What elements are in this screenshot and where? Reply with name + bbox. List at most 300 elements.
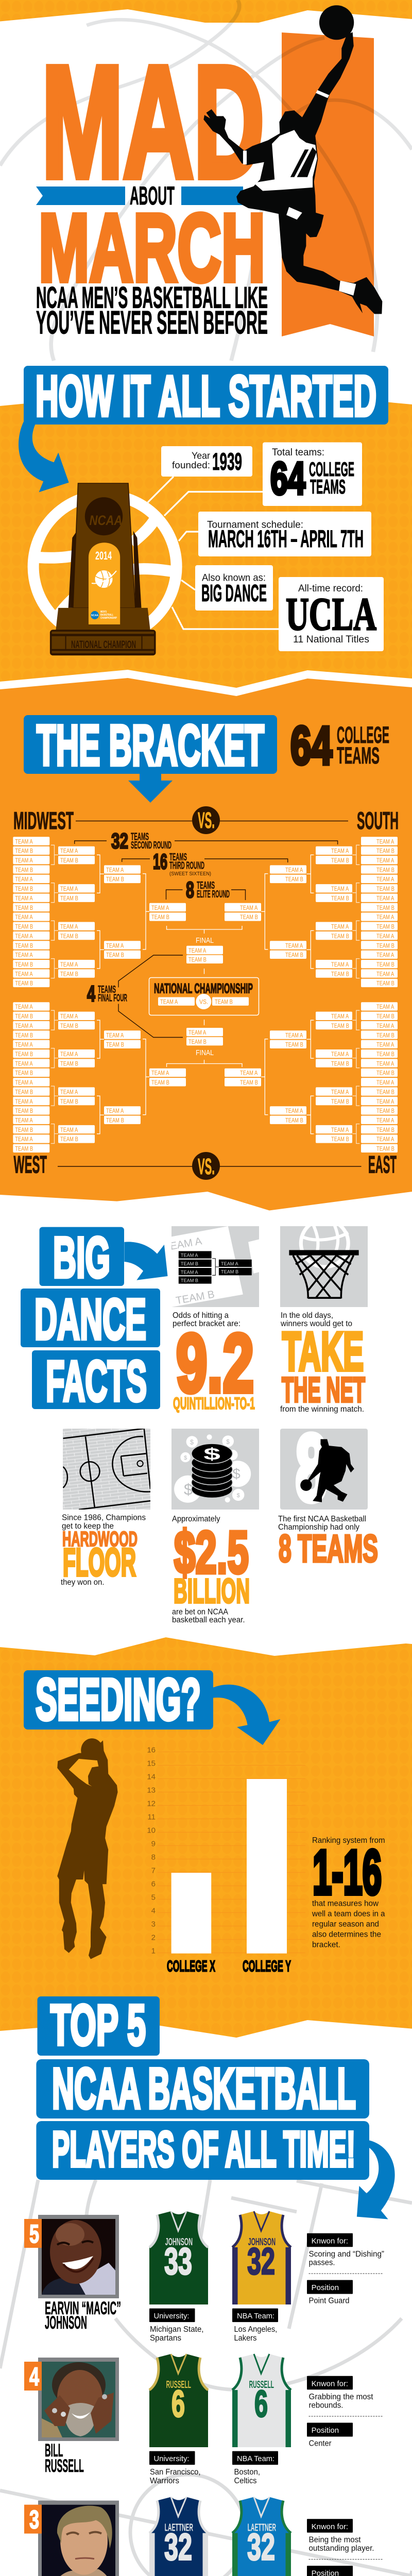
bracket: west region: TEAM B xyxy=(15,1146,33,1153)
final: upper matchup: TEAM B xyxy=(188,957,207,963)
round label: 8 teams elite round xyxy=(166,877,245,903)
bracket: east region: TEAM A xyxy=(285,1032,303,1039)
jersey: nba team xyxy=(232,2211,291,2304)
bracket: east region: TEAM B xyxy=(331,1136,349,1143)
chart axis numbers: 2 xyxy=(151,1933,156,1942)
bracket: midwest region: TEAM B xyxy=(151,914,169,921)
round label: 32 teams second round: SECOND ROUND xyxy=(131,840,171,851)
callout: all-time record: 11 National Titles xyxy=(293,634,369,645)
text block: seeding explanation: that measures how xyxy=(312,1899,379,1908)
bracket: east region: TEAM A xyxy=(331,1127,349,1133)
jersey: university: 6 xyxy=(171,2383,185,2425)
bracket: east region: TEAM A xyxy=(376,1023,394,1029)
arrow: heading to player list xyxy=(357,2140,395,2219)
panel: national championship: VS. xyxy=(199,998,208,1006)
bracket: east region: TEAM B xyxy=(376,1127,394,1133)
chart axis numbers: 14 xyxy=(147,1772,156,1782)
icon: NCAA trophy: NATIONAL CHAMPION xyxy=(71,639,136,651)
bracket: east region: TEAM B xyxy=(376,1051,394,1058)
jersey: university xyxy=(149,2211,208,2304)
icon: NCAA trophy: NCAA xyxy=(91,614,98,617)
connector lines to facts xyxy=(148,477,279,629)
region label row: midwest vs south xyxy=(13,806,399,834)
jersey: university: RUSSELL xyxy=(166,2379,191,2391)
fact: odds of perfect bracket: QUINTILLION-TO-1 xyxy=(173,1394,255,1413)
jersey: university xyxy=(149,2354,208,2447)
final: lower matchup xyxy=(186,1028,223,1057)
top yellow band xyxy=(0,0,412,23)
region label row: west vs east: WEST xyxy=(13,1151,47,1178)
icon: coin stack tile: $ xyxy=(203,1444,220,1463)
university label xyxy=(149,2309,204,2343)
jersey: nba team: 6 xyxy=(254,2383,268,2425)
bar: college y xyxy=(247,1779,287,1954)
icon: bracket tile: TEAM A xyxy=(181,1253,198,1258)
photo: Magic Johnson xyxy=(38,2215,119,2298)
round label: 16 teams third round: THIRD ROUND xyxy=(169,860,204,872)
heading: big dance facts: BIG xyxy=(53,1226,110,1290)
jersey: university: JOHNSON xyxy=(165,2236,193,2248)
bracket: south region: TEAM A xyxy=(331,961,349,968)
round label: 16 teams third round: TEAMS xyxy=(169,852,187,863)
name: BILL xyxy=(45,2441,63,2461)
text block: seeding explanation xyxy=(312,1836,385,1950)
name xyxy=(45,2298,121,2333)
fact: first championship 8 teams xyxy=(278,1415,378,1570)
callout: year founded: 1939 xyxy=(212,448,242,475)
background: court lines xyxy=(0,2180,412,2576)
known for and position: Knwon for: xyxy=(312,2380,348,2388)
bracket: midwest region: TEAM A xyxy=(15,857,33,864)
callout: year founded: Year xyxy=(192,451,210,461)
round label: 16 teams third round: 16 xyxy=(153,849,167,874)
final: upper matchup: FINAL xyxy=(196,936,214,945)
final: lower matchup: TEAM B xyxy=(188,1039,207,1045)
callout: also known as: BIG DANCE xyxy=(201,580,267,606)
heading: big dance facts: FACTS xyxy=(46,1349,147,1413)
bracket: midwest region: TEAM B xyxy=(15,942,33,950)
title: MARCH: MARCH xyxy=(39,195,265,301)
bracket: west region: TEAM A xyxy=(15,1098,33,1105)
icon: bracket tile: TEAM A xyxy=(181,1269,198,1275)
callout: total teams: TEAMS xyxy=(310,476,346,498)
rank tag 4 xyxy=(24,2362,42,2391)
bracket: west region: TEAM B xyxy=(15,1051,33,1058)
bracket: midwest region: TEAM B xyxy=(15,867,33,874)
fact: odds of perfect bracket: 9.2 xyxy=(176,1317,254,1409)
round label: 8 teams elite round: TEAMS xyxy=(197,880,215,891)
fact: billions bet: are bet on NCAA xyxy=(172,1607,229,1617)
bracket: east region: TEAM A xyxy=(331,1051,349,1058)
bracket: east region: TEAM A xyxy=(376,1098,394,1105)
panel: national championship: TEAM B xyxy=(215,998,233,1006)
text block: seeding explanation: Ranking system from xyxy=(312,1836,385,1845)
icon: NCAA trophy: MEN'S xyxy=(100,611,107,614)
icon: coin stack tile: $ xyxy=(184,1455,187,1461)
text block: seeding explanation: regular season and xyxy=(312,1920,379,1929)
bracket: south region: TEAM A xyxy=(376,876,394,883)
icon: NCAA trophy: 2014 xyxy=(95,549,112,562)
fact: first championship 8 teams: Championship had only xyxy=(278,1523,359,1532)
known for and position: Position xyxy=(312,2426,339,2435)
callout: total teams: Total teams: xyxy=(272,447,324,458)
fact: hardwood floor: FLOOR xyxy=(63,1540,136,1585)
fact: take the net: winners would get to xyxy=(280,1319,352,1328)
heading: top 5 ncaa basketball players of all time: TOP 5 xyxy=(50,1993,146,2057)
bracket: south region: TEAM A xyxy=(285,867,303,874)
bracket: south region: TEAM A xyxy=(376,857,394,864)
bracket: east region: TEAM B xyxy=(376,1089,394,1096)
player row: rank 4 Bill Russell xyxy=(24,2354,383,2485)
icon: NCAA trophy xyxy=(50,483,156,655)
fact: hardwood floor xyxy=(61,1429,150,1587)
round label: 8 teams elite round: 8 xyxy=(186,877,194,903)
round label: 32 teams second round: 32 xyxy=(111,828,128,853)
bracket: west region: TEAM A xyxy=(60,1089,78,1096)
bracket: west region: TEAM B xyxy=(15,1089,33,1096)
bracket: west region: TEAM B xyxy=(15,1127,33,1133)
bracket: center connectors xyxy=(167,926,242,1067)
bracket: south region: TEAM A xyxy=(331,886,349,892)
known for and position: Position xyxy=(312,2283,339,2292)
bracket: south region: TEAM B xyxy=(331,857,349,864)
bracket: west region: TEAM B xyxy=(15,1070,33,1077)
fact: hardwood floor: they won on. xyxy=(61,1578,104,1587)
bracket: west region: TEAM A xyxy=(15,1004,33,1011)
callout: all-time record xyxy=(279,577,384,651)
bracket: west region: TEAM B xyxy=(106,1117,124,1124)
nba team label: Boston, xyxy=(234,2468,260,2477)
text block: seeding explanation: bracket. xyxy=(312,1941,340,1950)
icon: NCAA trophy: CHAMPIONSHIP xyxy=(100,617,117,620)
icon: coin stack tile: $ xyxy=(226,1438,230,1446)
bracket: west region: TEAM A xyxy=(60,1051,78,1058)
bracket: midwest region: TEAM B xyxy=(15,961,33,968)
stat: 64 college teams: 64 xyxy=(290,716,332,776)
final: upper matchup xyxy=(186,936,223,963)
panel: national championship xyxy=(149,978,259,1015)
heading: big dance facts: DANCE xyxy=(35,1287,146,1351)
arrow: down to bracket xyxy=(128,773,173,803)
text block: seeding explanation: also determines the xyxy=(312,1930,381,1939)
bracket: midwest region: TEAM A xyxy=(15,914,33,921)
bracket: west region: TEAM B xyxy=(151,1079,169,1086)
icon: white basketball behind trophy xyxy=(33,495,177,638)
rank tag 3: 3 xyxy=(29,2505,39,2534)
bracket: midwest region: TEAM A xyxy=(15,971,33,978)
icon: dribbling player tile xyxy=(280,1415,368,1520)
bracket: east region: TEAM B xyxy=(240,1079,258,1086)
arrow: big dance to odds xyxy=(124,1242,168,1280)
bracket: south region: TEAM A xyxy=(240,905,258,911)
chart axis numbers: 10 xyxy=(147,1826,156,1835)
bracket: south region xyxy=(225,837,398,987)
university label: University: xyxy=(153,2454,190,2463)
known for and position: outstanding player. xyxy=(309,2544,374,2553)
bracket: midwest region: TEAM A xyxy=(15,876,33,883)
fact: odds of perfect bracket: Odds of hitting a xyxy=(173,1311,229,1320)
chart: seed ranking bars xyxy=(147,1745,305,1975)
bracket: south region: TEAM B xyxy=(376,942,394,950)
bracket: west region: TEAM A xyxy=(60,1013,78,1020)
nba team label xyxy=(232,2309,278,2343)
callout: year founded: founded: xyxy=(172,460,210,470)
bracket: south region: TEAM B xyxy=(376,923,394,930)
icon: shooting player silhouette xyxy=(57,1738,118,1959)
icon: basketball court tile xyxy=(63,1429,150,1510)
jersey: university: LAETTNER xyxy=(165,2522,193,2534)
bracket: west region: TEAM A xyxy=(106,1032,124,1039)
bracket: east region: TEAM B xyxy=(331,1060,349,1067)
final: lower matchup: TEAM A xyxy=(188,1029,207,1036)
bracket: east region: TEAM B xyxy=(285,1042,303,1048)
callout: tournament schedule: Tournament schedule: xyxy=(207,519,303,531)
chart axis numbers: 3 xyxy=(151,1920,156,1929)
rank tag 5 xyxy=(24,2219,42,2248)
bracket: east region: TEAM A xyxy=(331,1089,349,1096)
bracket: west region: TEAM B xyxy=(15,1013,33,1020)
known for and position: Knwon for: xyxy=(312,2237,348,2246)
bracket: south region: TEAM A xyxy=(376,838,394,845)
round label: 4 teams final four: FINAL FOUR xyxy=(98,993,127,1004)
fact: billions bet: $2.5 xyxy=(174,1519,249,1586)
bracket: west region: TEAM B xyxy=(60,1136,78,1143)
bracket: midwest region xyxy=(13,837,186,987)
fact: first championship 8 teams: The first NCAA Basketball xyxy=(278,1515,366,1523)
bracket: east region: TEAM B xyxy=(376,1146,394,1153)
bracket: midwest region: TEAM B xyxy=(15,923,33,930)
chart axis numbers: 13 xyxy=(147,1786,156,1795)
callout: also known as: Also known as: xyxy=(202,573,266,584)
bracket: west region: TEAM B xyxy=(15,1032,33,1039)
bracket: east region: TEAM A xyxy=(376,1117,394,1124)
fact: billions bet: Approximately xyxy=(172,1515,220,1523)
region label row: midwest vs south: VS. xyxy=(198,808,215,833)
fact: billions bet: basketball each year. xyxy=(172,1616,245,1624)
bracket: midwest region: TEAM A xyxy=(60,848,78,855)
bracket: west region: TEAM B xyxy=(60,1098,78,1105)
nba team label: Los Angeles, xyxy=(234,2325,277,2334)
name xyxy=(45,2441,84,2476)
final: upper matchup: TEAM A xyxy=(188,947,207,954)
callout: tournament schedule xyxy=(198,512,371,556)
nba team label: NBA Team: xyxy=(237,2312,274,2320)
label: college y: COLLEGE Y xyxy=(243,1957,291,1975)
round label: 16 teams third round xyxy=(122,849,288,877)
fact: take the net: In the old days, xyxy=(281,1311,333,1320)
university label: Warriors xyxy=(150,2477,179,2485)
bar: college x xyxy=(171,1873,211,1954)
known for and position: rebounds. xyxy=(309,2401,343,2410)
chart grid lines xyxy=(158,1752,305,1953)
bracket: midwest region: TEAM B xyxy=(106,952,124,959)
rank tag 3 xyxy=(24,2505,42,2534)
round label: 4 teams final four: TEAMS xyxy=(98,984,116,995)
bracket: east region: TEAM A xyxy=(240,1070,258,1077)
university label xyxy=(149,2451,201,2485)
arrow: heading to trophy xyxy=(19,421,69,492)
known for and position xyxy=(307,2519,383,2576)
nba team label: Celtics xyxy=(234,2477,257,2485)
icon: bracket tile: EAM A xyxy=(169,1235,203,1252)
bracket: midwest region: TEAM B xyxy=(15,848,33,855)
bracket: west region: TEAM A xyxy=(15,1079,33,1086)
callout: also known as xyxy=(195,565,273,611)
bracket: midwest region: TEAM A xyxy=(15,895,33,902)
chart axis numbers: 1 xyxy=(151,1946,156,1956)
bracket: south region: TEAM A xyxy=(376,914,394,921)
chart axis numbers: 5 xyxy=(151,1893,156,1902)
chart axis numbers: 7 xyxy=(151,1866,156,1875)
bracket: south region: TEAM B xyxy=(331,933,349,940)
heading: the bracket xyxy=(24,714,277,777)
bracket: midwest region: TEAM B xyxy=(60,895,78,902)
bracket: east region: TEAM B xyxy=(331,1023,349,1029)
callout: year founded xyxy=(161,446,252,477)
icon: coin stack tile: $ xyxy=(184,1481,193,1498)
fact: billions bet xyxy=(171,1429,259,1624)
panel: bracket background xyxy=(0,678,412,1211)
bracket: east region: TEAM B xyxy=(331,1098,349,1105)
orange hero ribbon xyxy=(282,32,374,336)
bracket: midwest region: TEAM A xyxy=(60,961,78,968)
bracket: west region: TEAM A xyxy=(15,1023,33,1029)
known for and position: Point Guard xyxy=(309,2296,349,2305)
bracket: south region: TEAM B xyxy=(376,905,394,911)
bracket: midwest region: TEAM A xyxy=(15,952,33,959)
region label row: midwest vs south: MIDWEST xyxy=(13,807,74,834)
known for and position xyxy=(307,2376,383,2448)
panel: seeding background xyxy=(0,1637,412,2038)
icon: coin stack tile xyxy=(171,1429,259,1510)
icon: bracket tile: TEAM B xyxy=(181,1261,198,1266)
bracket: midwest region: TEAM A xyxy=(15,933,33,940)
bracket: south region: TEAM A xyxy=(331,923,349,930)
jersey: nba team: 32 xyxy=(247,2527,275,2568)
bracket: midwest region: TEAM B xyxy=(15,980,33,987)
bracket: south region: TEAM A xyxy=(376,952,394,959)
panel: national championship: TEAM A xyxy=(160,998,178,1006)
bracket: west region: TEAM A xyxy=(15,1136,33,1143)
bracket: east region: TEAM B xyxy=(376,1070,394,1077)
icon: NCAA trophy: BASKETBALL xyxy=(100,614,113,617)
chart axis numbers: 15 xyxy=(147,1759,156,1768)
bracket: south region: TEAM B xyxy=(285,876,303,883)
jersey: nba team: 32 xyxy=(247,2241,275,2282)
round label: 32 teams second round: TEAMS xyxy=(131,832,149,843)
bracket: midwest region: TEAM A xyxy=(15,838,33,845)
name: EARVIN “MAGIC” xyxy=(45,2298,121,2318)
university label: San Francisco, xyxy=(150,2468,201,2477)
bracket: south region: TEAM B xyxy=(376,961,394,968)
bracket: midwest region: TEAM B xyxy=(106,876,124,883)
bracket: west region: TEAM A xyxy=(15,1042,33,1048)
bracket: south region: TEAM A xyxy=(376,933,394,940)
known for and position: Grabbing the most xyxy=(309,2393,373,2401)
name: JOHNSON xyxy=(45,2313,87,2333)
bracket: west region: TEAM A xyxy=(15,1060,33,1067)
known for and position: Center xyxy=(309,2439,332,2448)
bracket: south region: TEAM B xyxy=(331,971,349,978)
bracket: south region: TEAM B xyxy=(376,980,394,987)
icon: NCAA trophy: NCAA xyxy=(90,513,123,528)
bracket: west region: TEAM B xyxy=(60,1023,78,1029)
jersey: nba team: JOHNSON xyxy=(248,2236,276,2248)
icon: bracket tile: TEAM B xyxy=(221,1269,238,1275)
round label: 4 teams final four: 4 xyxy=(87,981,95,1007)
fact: take the net: from the winning match. xyxy=(280,1405,364,1414)
label: college x: COLLEGE X xyxy=(167,1957,215,1975)
fact: hardwood floor: HARDWOOD xyxy=(62,1527,138,1551)
player row: rank 3 Christian Laettner xyxy=(24,2497,383,2576)
region label row: west vs east xyxy=(13,1151,397,1180)
chart axis numbers: 9 xyxy=(151,1839,156,1849)
photo: Christian Laettner xyxy=(38,2501,119,2576)
icon: bracket tile: TEAM B xyxy=(181,1278,198,1283)
chart axis numbers: 11 xyxy=(147,1812,156,1822)
bracket: east region: TEAM A xyxy=(376,1136,394,1143)
fact: hardwood floor: get to keep the xyxy=(62,1522,114,1531)
round label: 16 teams third round: (SWEET SIXTEEN) xyxy=(169,871,211,877)
round label: 8 teams elite round: ELITE ROUND xyxy=(197,889,230,900)
chart axis numbers: 4 xyxy=(151,1906,156,1916)
icon: bracket tile: TEAM A xyxy=(221,1261,239,1266)
bracket: south region: TEAM B xyxy=(376,848,394,855)
icon: bracket tile: TEAM B xyxy=(175,1289,215,1307)
bracket: west region: TEAM B xyxy=(15,1108,33,1115)
title: MAD: MAD xyxy=(42,33,264,211)
bracket: south region: TEAM B xyxy=(331,895,349,902)
text: ABOUT xyxy=(130,181,175,210)
fact: billions bet: BILLION xyxy=(174,1572,250,1611)
final: lower matchup: FINAL xyxy=(196,1048,214,1057)
bracket: midwest region: TEAM A xyxy=(106,867,124,874)
bracket: west region: TEAM B xyxy=(106,1042,124,1048)
bracket: east region: TEAM A xyxy=(331,1013,349,1020)
bracket: east region: TEAM B xyxy=(376,1013,394,1020)
bracket: west region: TEAM A xyxy=(106,1108,124,1115)
bracket: midwest region: TEAM B xyxy=(60,971,78,978)
fact: take the net xyxy=(280,1219,368,1414)
university label: University: xyxy=(153,2312,190,2320)
nba team label: NBA Team: xyxy=(237,2454,274,2463)
chart axis numbers: 8 xyxy=(151,1853,156,1862)
jersey: nba team: LAETTNER xyxy=(248,2522,276,2534)
callout: total teams: COLLEGE xyxy=(309,459,354,481)
heading: big dance facts xyxy=(21,1226,160,1413)
bracket: west region: TEAM A xyxy=(15,1117,33,1124)
fact: hardwood floor: Since 1986, Champions xyxy=(62,1514,146,1522)
jersey: university: 32 xyxy=(164,2527,192,2568)
bracket: midwest region: TEAM B xyxy=(15,886,33,892)
icon: coin stack tile: $ xyxy=(190,1438,194,1446)
callout: all-time record: All-time record: xyxy=(298,583,363,594)
photo: Bill Russell xyxy=(38,2358,119,2441)
bracket: midwest region: TEAM B xyxy=(15,905,33,911)
known for and position: Scoring and “Dishing” xyxy=(309,2250,384,2259)
rank tag 5: 5 xyxy=(29,2219,39,2248)
blue ribbon right xyxy=(181,187,243,205)
arrow: seeding to chart xyxy=(213,1685,280,1745)
icon: coin stack tile: $ xyxy=(237,1493,241,1499)
bracket: south region: TEAM A xyxy=(376,895,394,902)
bracket: south region: TEAM A xyxy=(376,971,394,978)
jersey: university: 33 xyxy=(164,2241,192,2282)
icon: basketball and net tile xyxy=(280,1226,368,1307)
heading: seeding: SEEDING? xyxy=(36,1667,201,1733)
heading: top 5 ncaa basketball players of all time xyxy=(36,1993,369,2180)
chart axis numbers: 16 xyxy=(147,1745,156,1755)
